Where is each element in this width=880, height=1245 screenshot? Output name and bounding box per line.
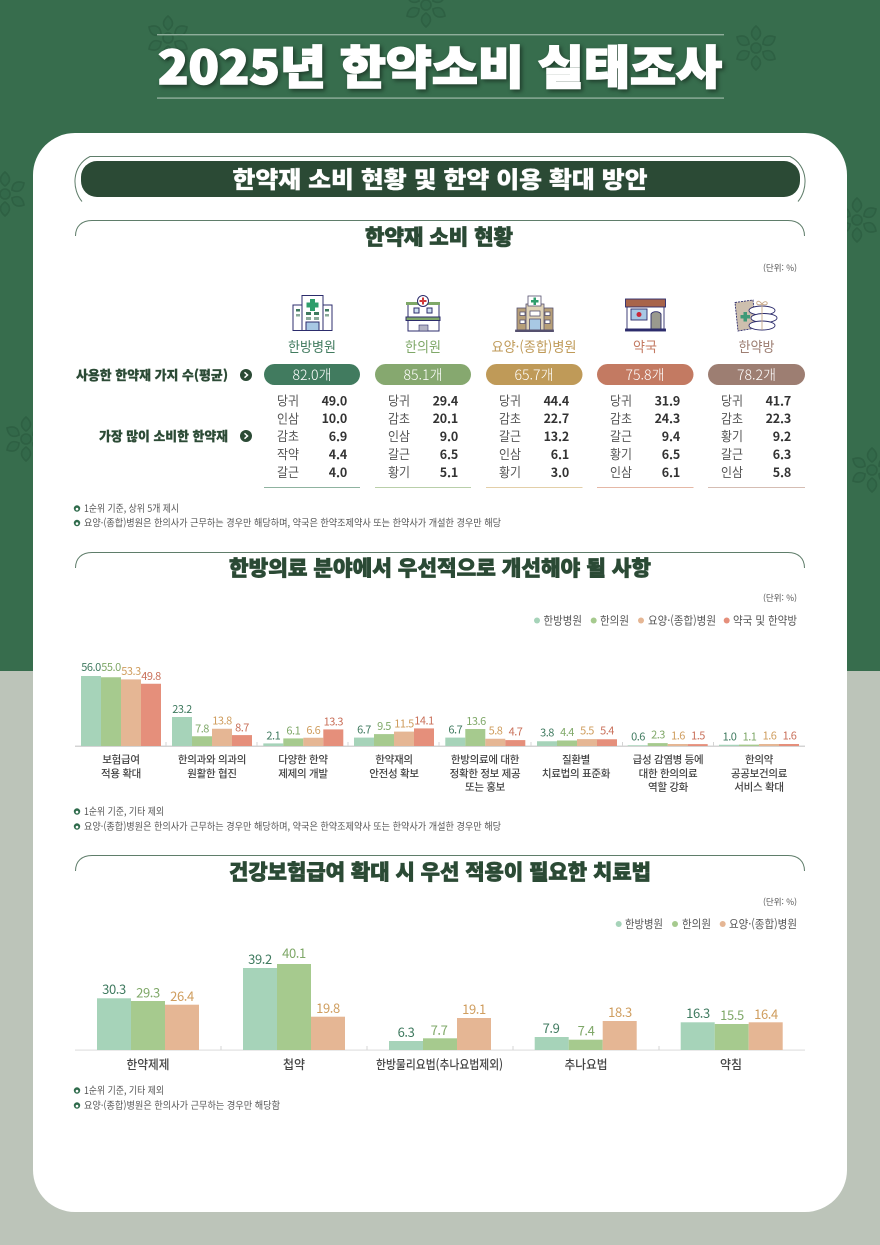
category labels 2: 급성 감염병 등에 bbox=[633, 752, 703, 767]
table: pharmacy: 6.5 bbox=[662, 444, 680, 463]
group: decoction: 39.2 bbox=[248, 949, 272, 968]
legend 3: 한방병원 bbox=[625, 916, 663, 932]
group: new formulations: 6.6 bbox=[306, 722, 321, 738]
column header names bbox=[288, 337, 775, 357]
group: herbal formulations: 29.3 bbox=[136, 982, 160, 1002]
column header names: 요양·(종합)병원 bbox=[492, 337, 576, 357]
group: accurate information: 13.6 bbox=[466, 713, 486, 729]
category labels 2: 적용 확대 bbox=[101, 766, 141, 781]
table: clinic: 갈근 bbox=[388, 444, 410, 463]
category labels 2: 한의과와 의과의 bbox=[178, 752, 246, 767]
average pills: 65.7개 bbox=[514, 365, 554, 385]
group: cooperation bbox=[172, 701, 252, 746]
legend 2: 약국 및 한약방 bbox=[733, 612, 797, 628]
table: pharmacy: 6.1 bbox=[662, 462, 680, 481]
unit label: (단위: %) bbox=[763, 592, 797, 604]
category labels 3: 추나요법 bbox=[564, 1054, 608, 1073]
category labels 2: 원활한 협진 bbox=[187, 766, 237, 781]
footnotes 1: 1순위 기준, 상위 5개 제시 bbox=[84, 500, 179, 515]
table: clinic: 황기 bbox=[388, 462, 410, 481]
group: standardisation bbox=[537, 722, 617, 746]
group: chuna: 7.4 bbox=[578, 1020, 595, 1040]
group: standardisation: 4.4 bbox=[560, 724, 574, 740]
group: new formulations bbox=[263, 714, 343, 746]
group: herbal formulations bbox=[97, 979, 199, 1050]
legend 2: 요양·(종합)병원 bbox=[648, 612, 716, 628]
table: nursing general hospital: 3.0 bbox=[551, 462, 569, 481]
table: herbal pharmacy: 감초 bbox=[721, 408, 743, 428]
category labels 3: 첩약 bbox=[283, 1054, 305, 1073]
group: public health: 1.1 bbox=[743, 728, 757, 744]
row label: average number of herbs used: 사용한 한약재 가지 수(평균) bbox=[76, 365, 228, 384]
group: safety: 14.1 bbox=[414, 712, 434, 728]
category labels 3 bbox=[126, 1054, 742, 1073]
table: herbal pharmacy bbox=[708, 390, 805, 488]
row label: most consumed herb: 가장 많이 소비한 한약재 bbox=[99, 426, 228, 445]
table: hanbang hospital: 4.4 bbox=[329, 444, 348, 463]
group: standardisation: 3.8 bbox=[540, 724, 554, 740]
table: nursing general hospital: 당귀 bbox=[499, 390, 521, 410]
table: clinic: 감초 bbox=[388, 408, 410, 428]
category labels 2: 질환별 bbox=[562, 752, 590, 767]
section banner: 한약재 소비 현황 및 한약 이용 확대 방안 bbox=[232, 160, 648, 194]
table: pharmacy: 황기 bbox=[610, 444, 632, 463]
group: herbal formulations: 30.3 bbox=[102, 979, 126, 998]
panel: herbal consumption status bbox=[74, 220, 805, 530]
category labels 2: 정확한 정보 제공 bbox=[450, 766, 521, 781]
footnotes 3 bbox=[74, 1082, 280, 1112]
table: nursing general hospital: 갈근 bbox=[499, 426, 521, 445]
group: pharmacopuncture bbox=[681, 1003, 783, 1050]
table: nursing general hospital: 감초 bbox=[499, 408, 521, 428]
column header names: 약국 bbox=[633, 337, 657, 357]
category labels 2: 서비스 확대 bbox=[734, 780, 784, 794]
group: safety: 9.5 bbox=[377, 718, 391, 734]
legend 2 bbox=[534, 612, 797, 628]
table: hanbang hospital: 6.9 bbox=[329, 426, 347, 445]
group: acute infection bbox=[628, 726, 708, 746]
group: acute infection: 1.6 bbox=[671, 728, 685, 744]
group: acute infection: 0.6 bbox=[631, 728, 645, 744]
column header names: 한약방 bbox=[738, 337, 775, 357]
group: cooperation: 13.8 bbox=[212, 712, 232, 728]
group: decoction: 40.1 bbox=[282, 943, 306, 962]
group: cooperation: 8.7 bbox=[235, 720, 249, 736]
group: pharmacopuncture: 16.3 bbox=[686, 1003, 710, 1022]
average pills: 82.0개 bbox=[292, 365, 332, 385]
table: clinic: 6.5 bbox=[440, 444, 458, 463]
group: insurance coverage: 56.0 bbox=[81, 659, 101, 675]
table: nursing general hospital: 황기 bbox=[499, 462, 521, 481]
table: clinic: 29.4 bbox=[433, 390, 459, 410]
table: hanbang hospital: 작약 bbox=[277, 444, 299, 463]
category labels 2: 대한 한의의료 bbox=[639, 766, 698, 781]
table: herbal pharmacy: 41.7 bbox=[766, 390, 791, 410]
table: clinic bbox=[375, 390, 471, 488]
category labels 2: 또는 홍보 bbox=[465, 780, 506, 794]
table: pharmacy bbox=[597, 390, 694, 488]
category labels 2: 치료법의 표준화 bbox=[542, 766, 611, 781]
category labels 2: 역할 강화 bbox=[648, 780, 689, 794]
table: hanbang hospital: 갈근 bbox=[277, 462, 299, 481]
group: physical therapy: 7.7 bbox=[431, 1020, 448, 1039]
category labels 2: 보험급여 bbox=[102, 752, 140, 767]
group: safety bbox=[354, 712, 434, 746]
category labels 2: 한방의료에 대한 bbox=[451, 752, 520, 767]
heading: consumption status: 한약재 소비 현황 bbox=[365, 222, 513, 252]
category labels 2: 제제의 개발 bbox=[278, 766, 328, 781]
table: herbal pharmacy: 갈근 bbox=[721, 444, 743, 463]
table: herbal pharmacy: 6.3 bbox=[773, 444, 791, 463]
average pills: 75.8개 bbox=[626, 365, 664, 385]
average pills: 85.1개 bbox=[404, 365, 442, 385]
category labels 2: 다양한 한약 bbox=[278, 752, 328, 767]
group: cooperation: 7.8 bbox=[195, 720, 209, 736]
heading frame 2 bbox=[76, 552, 804, 568]
group: accurate information: 5.8 bbox=[489, 722, 503, 738]
background: green upper band bbox=[0, 0, 880, 671]
average pills bbox=[264, 364, 805, 385]
table: pharmacy: 9.4 bbox=[662, 426, 681, 445]
group: physical therapy: 6.3 bbox=[398, 1022, 415, 1041]
group: physical therapy bbox=[389, 999, 491, 1050]
table: hanbang hospital: 10.0 bbox=[322, 408, 347, 427]
legend 2: 한의원 bbox=[600, 612, 629, 628]
title block: 2025년 한약소비 실태조사 bbox=[158, 32, 722, 98]
group: acute infection: 1.5 bbox=[691, 728, 705, 744]
category labels 3: 한방물리요법(추나요법제외) bbox=[376, 1054, 503, 1073]
group: public health: 1.0 bbox=[723, 728, 737, 744]
table: nursing general hospital: 22.7 bbox=[544, 408, 569, 427]
group: accurate information bbox=[445, 713, 525, 746]
legend 3: 요양·(종합)병원 bbox=[729, 916, 797, 932]
icon: pharmacy bbox=[626, 299, 666, 331]
group: safety: 6.7 bbox=[357, 722, 371, 738]
group: acute infection: 2.3 bbox=[651, 726, 665, 742]
unit label: (단위: %) bbox=[763, 896, 797, 908]
category labels 2: 안전성 확보 bbox=[369, 766, 419, 781]
panel: priorities for improvement bbox=[74, 552, 805, 833]
table: nursing general hospital: 13.2 bbox=[544, 426, 569, 445]
icon: nursing general hospital bbox=[516, 296, 554, 332]
table: herbal pharmacy: 9.2 bbox=[773, 426, 791, 445]
icon: herbal pharmacy bbox=[735, 300, 777, 331]
table: herbal pharmacy: 당귀 bbox=[721, 390, 743, 410]
heading frame 1 bbox=[76, 220, 804, 236]
footnotes 2: 요양·(종합)병원은 한의사가 근무하는 경우만 해당하며, 약국은 한약조제약사 또는 한약사가 개설한 경우만 해당 bbox=[84, 818, 501, 833]
group: herbal formulations: 26.4 bbox=[170, 986, 194, 1005]
table: nursing general hospital: 6.1 bbox=[551, 444, 569, 463]
table: clinic: 20.1 bbox=[433, 408, 458, 427]
group: decoction bbox=[243, 943, 345, 1050]
group: standardisation: 5.4 bbox=[600, 722, 614, 738]
group: insurance coverage bbox=[81, 659, 161, 746]
footnotes 2: 1순위 기준, 기타 제외 bbox=[84, 803, 164, 818]
heading: treatments: 건강보험급여 확대 시 우선 적용이 필요한 치료법 bbox=[229, 856, 651, 886]
table: pharmacy: 인삼 bbox=[610, 462, 632, 481]
unit label: (단위: %) bbox=[763, 262, 797, 274]
background: grey lower band bbox=[0, 671, 880, 1245]
column header names: 한방병원 bbox=[288, 337, 336, 357]
group: insurance coverage: 53.3 bbox=[121, 663, 141, 679]
bar chart: priorities bbox=[75, 659, 805, 747]
group: chuna: 7.9 bbox=[543, 1018, 560, 1037]
table: hanbang hospital bbox=[264, 390, 360, 488]
table: hanbang hospital: 당귀 bbox=[277, 390, 299, 410]
group: public health: 1.6 bbox=[783, 728, 797, 744]
category labels 2: 한의약 bbox=[745, 752, 774, 767]
section banner bbox=[75, 156, 805, 202]
table: nursing general hospital: 인삼 bbox=[499, 444, 521, 463]
category labels 2 bbox=[101, 752, 788, 794]
table: hanbang hospital: 49.0 bbox=[322, 390, 347, 410]
column header names: 한의원 bbox=[405, 337, 441, 357]
table: herbal pharmacy: 황기 bbox=[721, 426, 743, 445]
decorative ornaments bbox=[0, 0, 880, 492]
table: hanbang hospital: 감초 bbox=[277, 426, 299, 445]
group: public health: 1.6 bbox=[763, 728, 777, 744]
table: pharmacy: 갈근 bbox=[610, 426, 632, 445]
panel: insurance expansion treatments bbox=[74, 856, 805, 1112]
category labels 3: 한약제제 bbox=[126, 1054, 170, 1073]
group: cooperation: 23.2 bbox=[172, 701, 192, 717]
footnotes 2 bbox=[74, 803, 501, 833]
table: pharmacy: 24.3 bbox=[655, 408, 680, 427]
group: chuna bbox=[535, 1002, 637, 1050]
table: hanbang hospital: 4.0 bbox=[329, 462, 347, 481]
group: new formulations: 13.3 bbox=[324, 714, 343, 730]
icon: oriental hospital bbox=[293, 296, 332, 330]
footnotes 1: 요양·(종합)병원은 한의사가 근무하는 경우만 해당하며, 약국은 한약조제약사 또는 한약사가 개설한 경우만 해당 bbox=[84, 514, 501, 530]
table: clinic: 5.1 bbox=[440, 462, 458, 481]
table: pharmacy: 감초 bbox=[610, 408, 632, 428]
group: insurance coverage: 55.0 bbox=[101, 659, 121, 675]
legend 3 bbox=[616, 916, 797, 932]
group: accurate information: 6.7 bbox=[448, 722, 463, 738]
table: clinic: 당귀 bbox=[388, 390, 410, 410]
group: physical therapy: 19.1 bbox=[462, 999, 486, 1018]
footnotes 1 bbox=[74, 500, 501, 530]
group: safety: 11.5 bbox=[394, 716, 414, 732]
table: herbal pharmacy: 22.3 bbox=[766, 408, 791, 427]
group: public health bbox=[719, 728, 799, 746]
group: standardisation: 5.5 bbox=[580, 722, 594, 738]
heading: priorities: 한방의료 분야에서 우선적으로 개선해야 될 사항 bbox=[229, 552, 651, 582]
legend 3: 한의원 bbox=[682, 916, 711, 932]
table: nursing general hospital: 44.4 bbox=[544, 390, 570, 410]
group: accurate information: 4.7 bbox=[509, 724, 523, 740]
group: insurance coverage: 49.8 bbox=[141, 668, 161, 684]
category labels 2: 공공보건의료 bbox=[731, 766, 788, 781]
table: pharmacy: 당귀 bbox=[610, 390, 632, 410]
group: decoction: 19.8 bbox=[316, 998, 340, 1017]
legend 2: 한방병원 bbox=[544, 612, 582, 628]
table: pharmacy: 31.9 bbox=[655, 390, 680, 410]
heading frame 3 bbox=[76, 856, 804, 871]
table: nursing general hospital bbox=[486, 390, 582, 488]
footnotes 3: 요양·(종합)병원은 한의사가 근무하는 경우만 해당함 bbox=[84, 1097, 280, 1112]
footnotes 3: 1순위 기준, 기타 제외 bbox=[84, 1082, 164, 1097]
group: chuna: 18.3 bbox=[608, 1002, 632, 1021]
group: pharmacopuncture: 16.4 bbox=[754, 1004, 778, 1023]
icon: clinic bbox=[406, 296, 440, 331]
category labels 3: 약침 bbox=[720, 1054, 742, 1073]
category labels 2: 한약재의 bbox=[375, 752, 413, 767]
table: herbal pharmacy: 5.8 bbox=[773, 462, 791, 481]
table: hanbang hospital: 인삼 bbox=[277, 408, 299, 428]
group: new formulations: 2.1 bbox=[266, 728, 281, 744]
table: clinic: 인삼 bbox=[388, 426, 410, 445]
group: pharmacopuncture: 15.5 bbox=[720, 1005, 744, 1024]
group: new formulations: 6.1 bbox=[286, 722, 301, 738]
average pills: 78.2개 bbox=[737, 365, 776, 385]
bar chart: treatments bbox=[75, 943, 805, 1051]
table: clinic: 9.0 bbox=[440, 426, 458, 445]
table: herbal pharmacy: 인삼 bbox=[721, 462, 743, 481]
